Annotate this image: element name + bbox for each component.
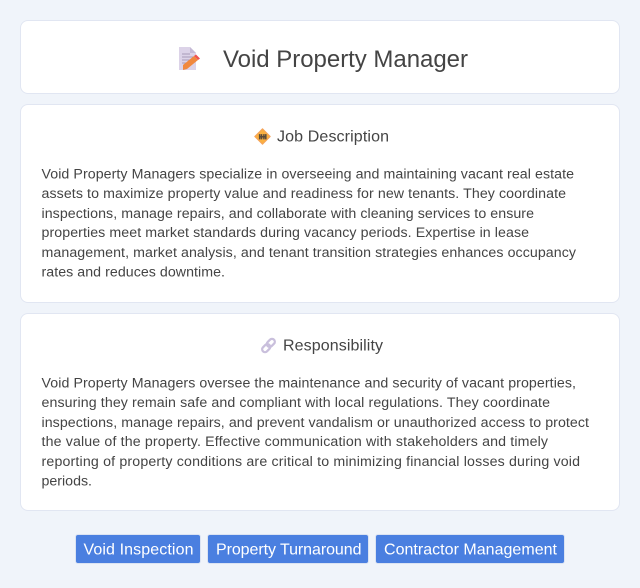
title text: Void Property Manager: [223, 46, 468, 73]
panel: title: [20, 20, 620, 94]
text block: responsibility: the value of the property. Effective communication with stakeholders and timely: [42, 434, 549, 450]
text block: responsibility: Void Property Managers oversee the maintenance and security of vacant properties,: [42, 376, 576, 392]
text block: job description: management, market analysis, and tenant transition strategies enhances occupancy: [42, 245, 577, 261]
tag: contractor management: Contractor Management: [384, 542, 558, 558]
text block: job description: inspections, manage repairs, and collaborate with cleaning services to ensure: [42, 206, 534, 222]
text block: job description: assets to maximize property value and readiness for new tenants. They coordinate: [42, 186, 566, 202]
heading: job description: Job Description: [277, 128, 389, 146]
heading: responsibility: Responsibility: [283, 338, 383, 354]
text block: responsibility: reporting of property conditions are critical to minimizing financial losses during void: [42, 454, 580, 470]
text block: responsibility: periods.: [42, 474, 92, 490]
tag: property turnaround: [207, 534, 369, 564]
text block: job description: Void Property Managers specialize in overseeing and maintaining vacant real estate: [42, 166, 574, 182]
panel: job description: [20, 104, 620, 303]
icon: diamond sign: [254, 128, 271, 145]
tag: contractor management: [375, 534, 565, 564]
tag: void inspection: [75, 534, 201, 564]
tag: void inspection: Void Inspection: [84, 542, 194, 558]
text block: responsibility: inspections, manage repairs, and prevent vandalism or unauthorized access to protect: [42, 415, 589, 431]
tag: property turnaround: Property Turnaround: [216, 542, 362, 558]
text block: job description: [42, 166, 577, 280]
icon: chain link: [261, 338, 276, 354]
text block: responsibility: [42, 376, 589, 490]
panel: responsibility: [20, 313, 620, 511]
text block: responsibility: ensuring they remain safe and compliant with local regulations. They coordinate: [42, 395, 550, 411]
text block: job description: properties meet market standards during vacancy periods. Expertise in lease: [42, 225, 529, 241]
text block: job description: rates and reduces downtime.: [42, 264, 225, 280]
icon: document with pencil: [179, 47, 200, 70]
